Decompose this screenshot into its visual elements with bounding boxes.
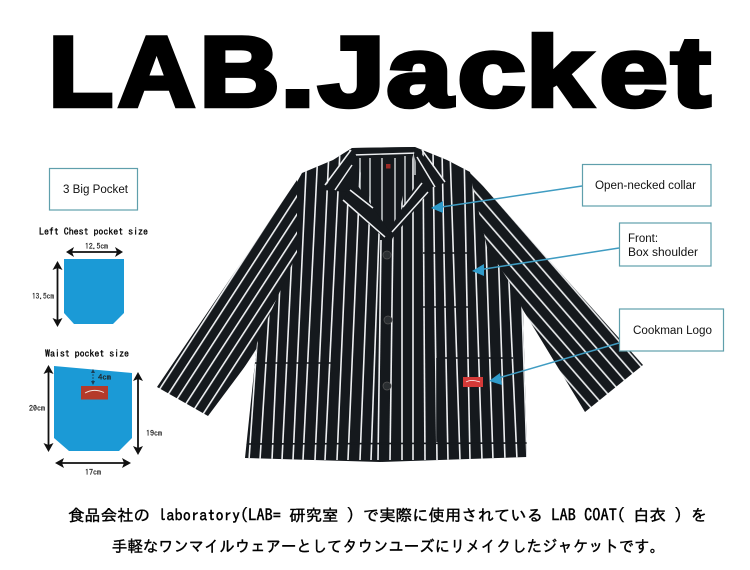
left waist pocket [255, 363, 332, 443]
17cm label: 17cm [85, 468, 101, 476]
19cm label: 19cm [146, 429, 162, 437]
right waist pocket [437, 358, 513, 442]
title: J [318, 17, 385, 127]
description text: 食品会社の laboratory(LAB= 研究室 ) で実際に使用されている LAB COAT( 白衣 ) を [68, 507, 707, 523]
title: . [280, 17, 315, 128]
blue pocket shape [54, 366, 132, 451]
left panel: 3 big pocket label: 3 Big Pocket [63, 184, 129, 196]
title: a [386, 17, 454, 127]
20cm label: 20cm [29, 404, 45, 412]
callout: open-necked collar [582, 164, 711, 206]
height arrow [52, 261, 62, 327]
arrow: box shoulder [472, 248, 619, 276]
title: t [671, 17, 711, 127]
description text [68, 507, 707, 554]
title: B [200, 17, 280, 127]
callout: box shoulder: Box shoulder [628, 247, 698, 259]
neck tag [386, 164, 390, 168]
jacket body [240, 140, 530, 470]
width arrow [66, 247, 123, 257]
height label: 13.5cm [32, 292, 54, 300]
title: c [458, 16, 526, 127]
callout: open-necked collar: Open-necked collar [595, 180, 696, 192]
callout: box shoulder [620, 223, 711, 266]
jacket photo [157, 140, 643, 470]
arrow: cookman logo [489, 343, 619, 385]
title: e [600, 16, 668, 127]
arrow: collar [431, 186, 582, 213]
title: k [526, 17, 592, 127]
title [48, 16, 711, 128]
left panel: 3 big pocket label [50, 168, 138, 210]
callout: cookman logo: Cookman Logo [633, 325, 712, 337]
blue pocket shape [64, 259, 124, 324]
red logo [81, 386, 108, 400]
description text: 手軽なワンマイルウェアーとしてタウンユーズにリメイクしたジャケットです。 [112, 538, 665, 554]
buttons [383, 251, 392, 390]
left sleeve [157, 180, 300, 416]
17cm arrow [55, 458, 131, 468]
waist pocket diagram [29, 365, 162, 476]
title: A [118, 16, 195, 127]
callout: cookman logo [620, 309, 724, 351]
chest pocket diagram [32, 242, 124, 327]
red logo patch [463, 377, 483, 387]
20cm arrow [44, 365, 54, 452]
width label: 12.5cm [85, 242, 108, 250]
collar and lapels [323, 147, 447, 240]
19cm arrow [133, 372, 143, 455]
4cm label: 4cm [98, 373, 111, 381]
heading: waist pocket size: Waist pocket size [45, 349, 129, 359]
heading: left chest pocket size: Left Chest pocket size [39, 227, 148, 237]
chest pocket [423, 253, 468, 307]
title: L [48, 16, 113, 127]
4cm arrow [91, 369, 95, 385]
right sleeve [468, 171, 643, 412]
callout: box shoulder: Front: [628, 233, 658, 245]
